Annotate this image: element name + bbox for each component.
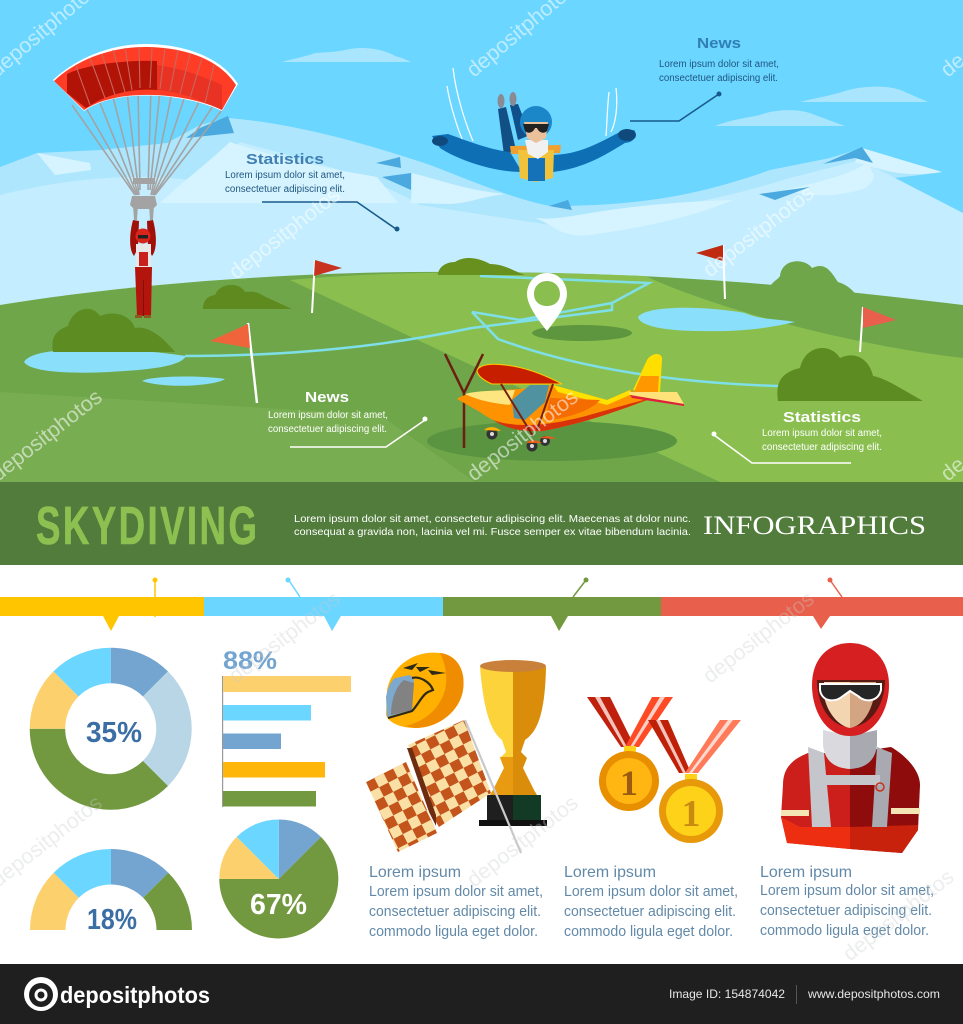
neck: [525, 140, 548, 159]
icon: orange helmet: [386, 653, 464, 728]
hood: [465, 390, 515, 405]
chart: donut 35%: 35%: [86, 717, 142, 749]
lakes: [24, 308, 795, 386]
callout: statistics lower right: Lorem ipsum dolor sit amet,: [762, 428, 882, 439]
text block: column 1: consectetuer adipiscing elit.: [369, 903, 541, 920]
fuselage: [457, 385, 650, 431]
pin shadow: [532, 325, 632, 341]
icon: medals: [587, 697, 741, 843]
watermarks on white: [0, 587, 959, 966]
callout: news lower left: Lorem ipsum dolor sit amet,: [268, 410, 388, 421]
helmet: [520, 106, 552, 138]
ribbons: [587, 697, 635, 747]
icon: trophy: [479, 660, 547, 826]
face opening: [817, 680, 885, 727]
face: [824, 682, 850, 728]
watermarks: depositphotos: [224, 183, 345, 284]
watermarks on white: depositphotos: [698, 587, 819, 688]
callout: statistics lower right: Statistics: [783, 409, 861, 426]
icon: location pin: [527, 273, 567, 331]
footer image id: Image ID: 154874042: [669, 987, 785, 1001]
footer brand: depositphotos: [60, 982, 210, 1008]
lower body: [781, 817, 850, 849]
side panel: [545, 398, 600, 421]
body left: [781, 753, 850, 849]
band description: [294, 513, 691, 538]
illustration: airplane: [445, 354, 684, 452]
callout: news lower left: News: [305, 389, 349, 406]
route line: [185, 276, 778, 386]
chart: donut 35%: [30, 648, 192, 810]
illustration: skydiver: [432, 68, 636, 182]
callout: statistics lower right: [712, 409, 882, 463]
clouds: [282, 48, 928, 126]
harness risers: [130, 178, 157, 220]
icon: medals: 1: [682, 793, 700, 835]
stabilizer: [629, 392, 684, 404]
watermarks: depositphotos: [698, 181, 819, 282]
callout: news top right: Lorem ipsum dolor sit amet,: [659, 59, 779, 70]
raised arms: [498, 107, 516, 155]
motion lines: [447, 68, 617, 141]
watermarks: [0, 0, 963, 486]
mountains: [0, 116, 963, 310]
chart: pie 67%: [219, 819, 338, 938]
callout: statistics lower right: consectetuer adipiscing elit.: [762, 442, 882, 453]
callout: news top right: [630, 35, 779, 121]
canopy: [53, 44, 238, 111]
plane shadow: [427, 421, 677, 461]
text block: column 1: [369, 864, 543, 940]
fuselage yellow top: [553, 385, 632, 405]
callout: statistics top left: [225, 151, 400, 232]
jumper: [130, 220, 156, 318]
chart: half donut 18%: 18%: [87, 904, 137, 936]
chart: bar chart 88%: 88%: [223, 647, 277, 675]
callout: news top right: News: [697, 35, 741, 52]
watermarks on white: depositphotos: [838, 865, 959, 966]
struts: [501, 384, 553, 436]
helmet: [812, 643, 889, 736]
icon: checkered flags: [366, 720, 521, 853]
wheels: [484, 427, 556, 452]
band description: consequat a gravida non, lacinia vel mi. Fusce semper ex vitae bibendum lacinia.: [294, 526, 691, 538]
band description: Lorem ipsum dolor sit amet, consectetur adipiscing elit. Maecenas at dolor nunc.: [294, 513, 691, 525]
ground shade: [0, 392, 475, 482]
illustration: parachute and jumper: [53, 44, 238, 318]
parachute lines: [72, 88, 222, 195]
text block: column 2: Lorem ipsum dolor sit amet,: [564, 883, 738, 900]
callout: news lower left: [268, 389, 428, 447]
text block: column 3: commodo ligula eget dolor.: [760, 922, 929, 939]
panel: landscape scene: [0, 0, 963, 482]
flags: [210, 245, 896, 403]
goggles: [820, 684, 881, 700]
medal 1: [624, 746, 636, 752]
icon: camera logo: [24, 977, 58, 1011]
title: skydiving: SKYDIVING: [36, 495, 259, 556]
text block: column 1: Lorem ipsum dolor sit amet,: [369, 883, 543, 900]
pack: [510, 145, 561, 154]
callout: news top right: consectetuer adipiscing elit.: [659, 73, 778, 84]
neck: [823, 730, 850, 769]
text block: column 3: [760, 864, 934, 939]
window: [512, 385, 549, 420]
sky: [0, 0, 963, 310]
ground highlight: [290, 272, 963, 482]
text block: column 2: commodo ligula eget dolor.: [564, 923, 733, 940]
outstretched arms: [432, 134, 522, 172]
icon: pilot portrait: [781, 643, 920, 853]
callout: statistics top left: consectetuer adipiscing elit.: [225, 184, 345, 195]
ground: [0, 272, 963, 482]
text block: column 3: Lorem ipsum dolor sit amet,: [760, 882, 934, 899]
text block: column 2: Lorem ipsum: [564, 864, 656, 881]
harness: [518, 150, 554, 182]
text block: column 3: consectetuer adipiscing elit.: [760, 902, 932, 919]
callout: statistics top left: Lorem ipsum dolor sit amet,: [225, 170, 345, 181]
watermarks on white: depositphotos: [224, 587, 345, 688]
subtitle: infographics: INFOGRAPHICS: [703, 511, 926, 540]
medal 2: [685, 774, 697, 780]
propeller: [445, 354, 483, 448]
title band: [0, 482, 963, 565]
chart: pie 67%: 67%: [250, 889, 307, 921]
watermarks: depositphotos: [462, 385, 583, 486]
fuselage lower stripe: [493, 399, 650, 431]
chart: bar chart 88%: [222, 647, 351, 807]
straps: [808, 747, 831, 827]
footer url: www.depositphotos.com: [807, 987, 940, 1001]
body right: [850, 747, 920, 853]
bushes: [52, 258, 923, 401]
watermarks on white: depositphotos: [462, 791, 583, 892]
icon: medals: 1: [620, 763, 638, 803]
wing: [477, 364, 562, 384]
ring badge: [876, 783, 884, 791]
callout: news lower left: consectetuer adipiscing elit.: [268, 424, 387, 435]
text block: column 2: consectetuer adipiscing elit.: [564, 903, 736, 920]
text block: column 1: Lorem ipsum: [369, 864, 461, 881]
callout: statistics top left: Statistics: [246, 151, 324, 168]
colored header strip: [0, 578, 963, 631]
text block: column 3: Lorem ipsum: [760, 864, 852, 881]
footer bar: [0, 964, 963, 1024]
chart: half donut 18%: [30, 849, 192, 936]
tail fin: [633, 354, 662, 392]
text block: column 2: [564, 864, 738, 940]
text block: column 1: commodo ligula eget dolor.: [369, 923, 538, 940]
